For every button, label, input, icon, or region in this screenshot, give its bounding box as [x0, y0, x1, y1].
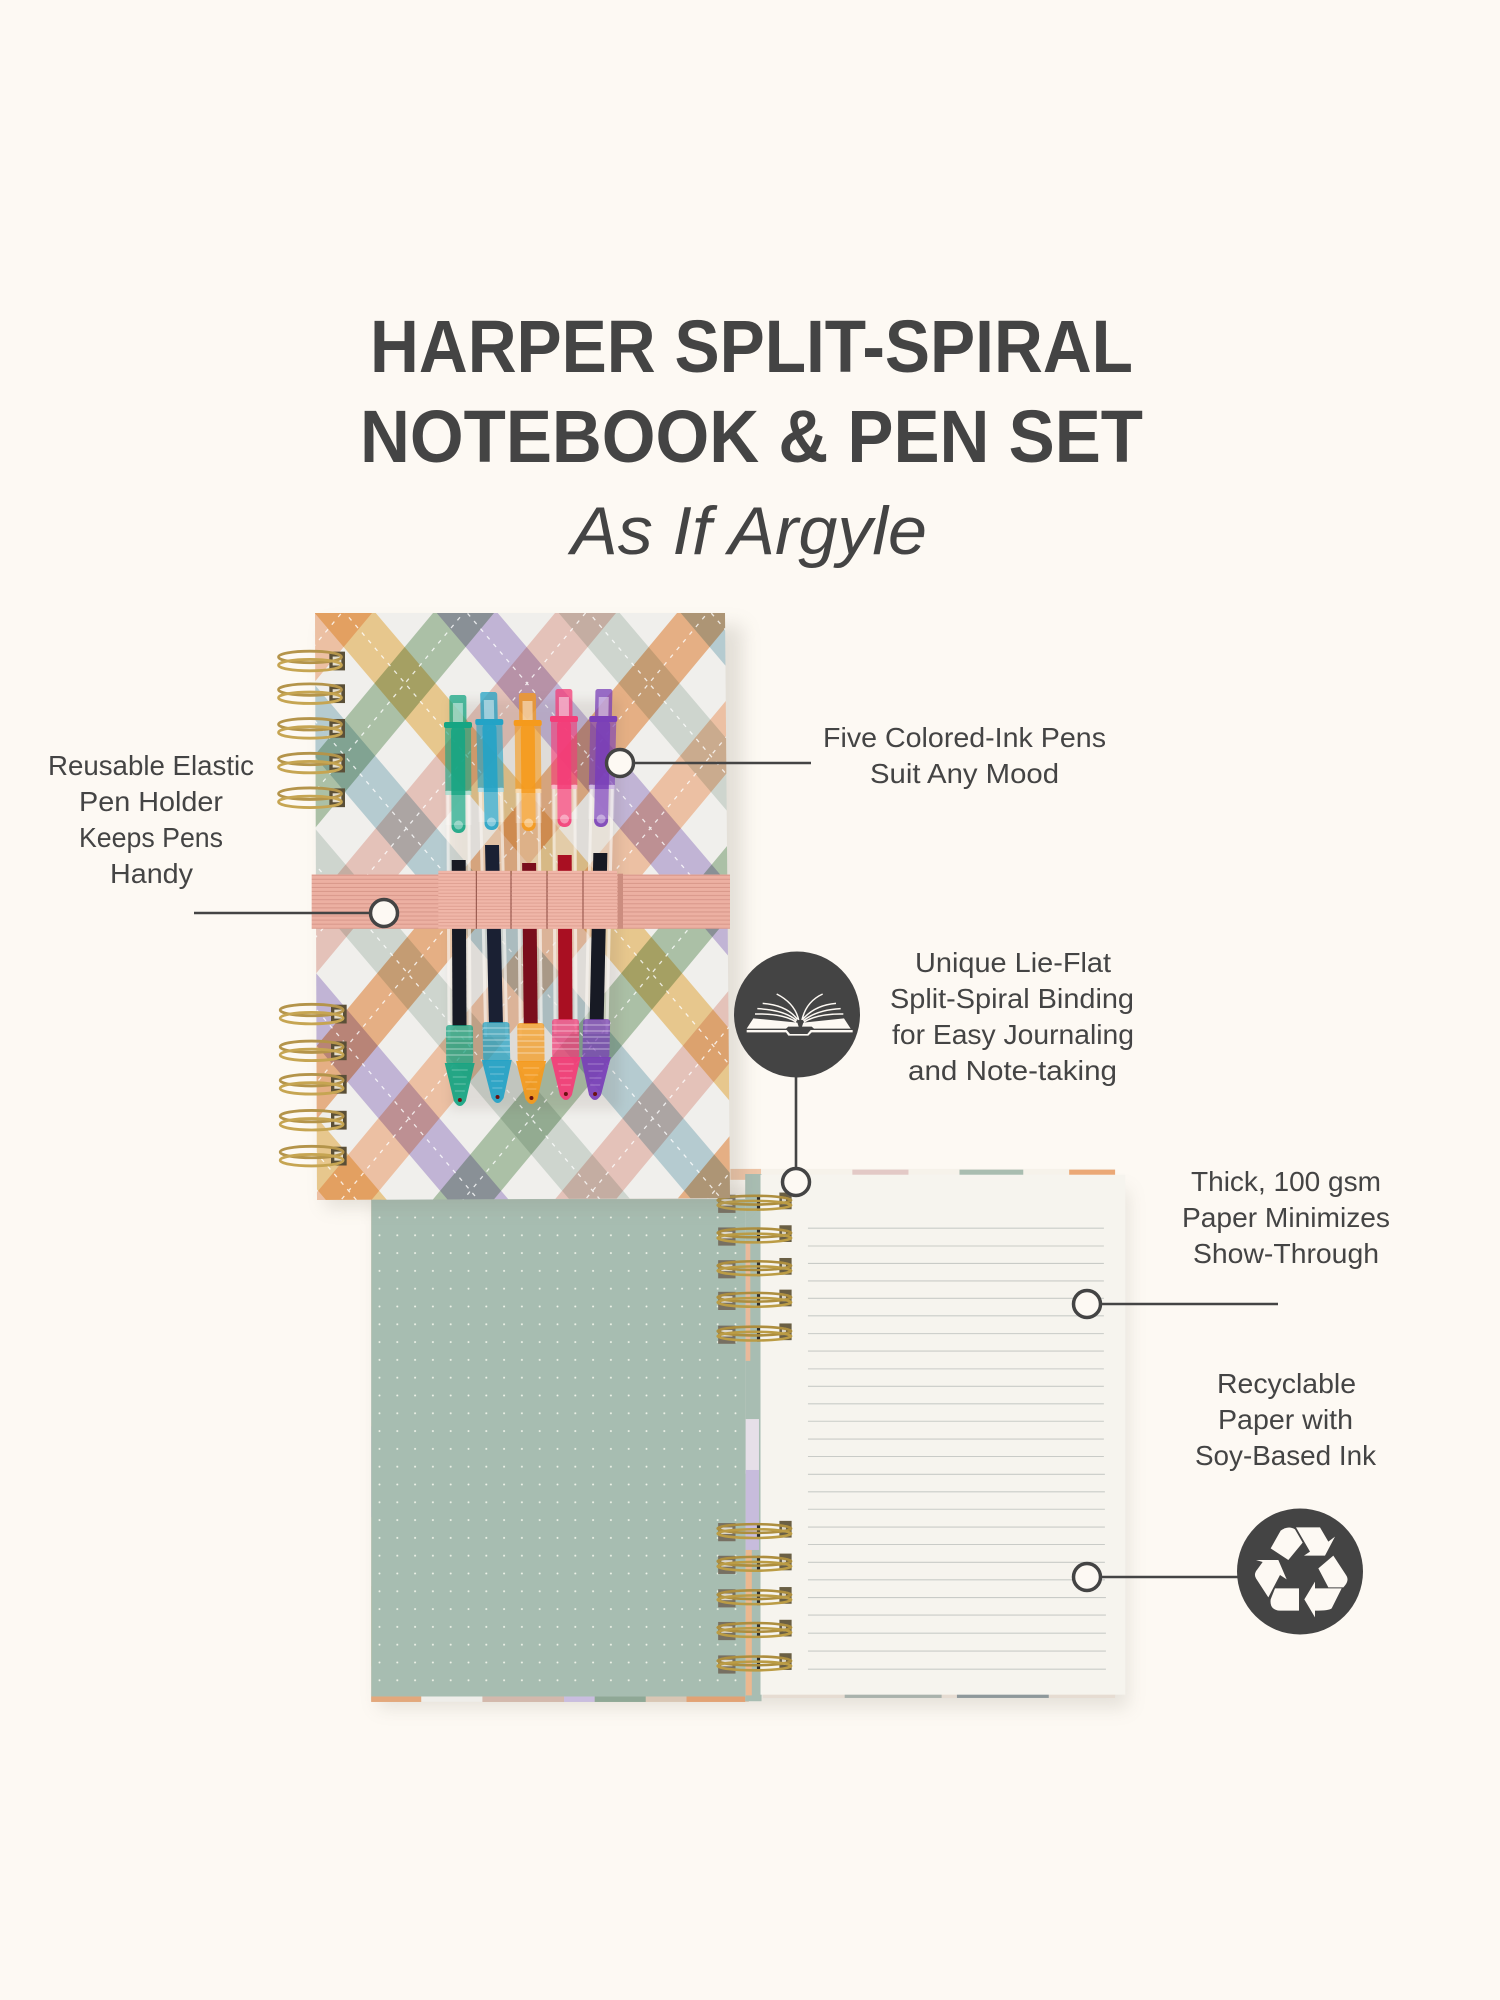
text: binding — [890, 947, 1134, 1086]
back cover strips — [371, 1169, 1115, 1702]
text: elastic holder — [48, 750, 254, 889]
text: elastic holder: Pen Holder — [79, 786, 223, 817]
text: binding: Unique Lie-Flat — [915, 947, 1111, 978]
lined right page — [761, 1175, 1125, 1695]
pink pen — [549, 689, 581, 1100]
text: paper — [1182, 1166, 1390, 1269]
title: NOTEBOOK & PEN SET — [360, 395, 1143, 478]
purple pen — [580, 689, 619, 1100]
cover shadow — [325, 625, 743, 1207]
connector: recycle — [1074, 1564, 1245, 1590]
text: binding: for Easy Journaling — [892, 1019, 1134, 1050]
icon: recycle — [1237, 1508, 1363, 1634]
text: paper: Show-Through — [1193, 1238, 1379, 1269]
text: elastic holder: Handy — [110, 858, 193, 889]
text: paper: Paper Minimizes — [1182, 1202, 1390, 1233]
text: recyclable: Paper with — [1218, 1404, 1353, 1435]
text: elastic holder: Reusable Elastic — [48, 750, 254, 781]
connector: elastic — [194, 900, 398, 926]
pen shadow — [450, 700, 620, 1110]
connector: binding — [782, 1070, 810, 1196]
orange pen — [512, 693, 547, 1104]
title — [360, 305, 1143, 478]
text: recyclable — [1195, 1368, 1377, 1471]
text: recyclable: Recyclable — [1217, 1368, 1356, 1399]
text: binding: and Note-taking — [908, 1055, 1117, 1086]
open notebook — [371, 1169, 1128, 1708]
text: elastic holder: Keeps Pens — [79, 822, 223, 853]
spine — [745, 1174, 762, 1701]
five pens — [443, 689, 620, 1110]
closed notebook — [277, 613, 748, 1212]
dot grid — [375, 1205, 747, 1695]
connector: pens — [606, 750, 811, 776]
spiral rings — [718, 1193, 792, 1674]
text: binding: Split-Spiral Binding — [890, 983, 1134, 1014]
text: recyclable: Soy-Based Ink — [1195, 1440, 1377, 1471]
connector: paper — [1074, 1290, 1278, 1318]
left spiral rings — [278, 651, 347, 1166]
text: paper: Thick, 100 gsm — [1191, 1166, 1381, 1197]
argyle cover — [315, 613, 730, 1200]
icon: open book — [734, 952, 860, 1078]
notebook shadow — [378, 1190, 1128, 1708]
text: pens: Five Colored-Ink Pens — [823, 722, 1106, 753]
elastic pen holder — [312, 871, 730, 929]
title: HARPER SPLIT-SPIRAL — [370, 305, 1133, 388]
dotted left page — [371, 1199, 745, 1696]
stitching — [315, 613, 728, 1200]
subtitle: As If Argyle — [567, 493, 927, 569]
text: pens — [823, 722, 1106, 789]
blue pen — [474, 692, 513, 1103]
teal pen — [443, 695, 475, 1106]
text: pens: Suit Any Mood — [870, 758, 1059, 789]
